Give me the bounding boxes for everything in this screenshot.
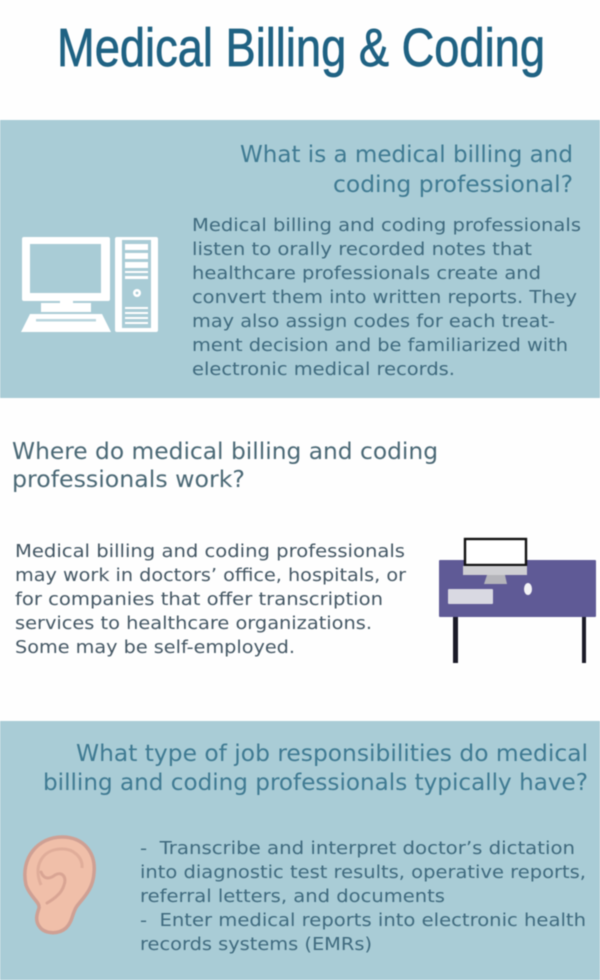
heading: where do professionals work [12,437,438,493]
text block: professional description: ment decision and be familiarized with [192,335,568,356]
icon: ear [25,837,94,933]
text block: workplaces [15,541,407,658]
heading: job responsibilities: billing and coding professionals typically have? [43,768,588,796]
panel: job responsibilities [0,721,600,980]
text block: workplaces: services to healthcare organizations. [15,613,372,634]
heading: job responsibilities [43,739,588,796]
text block: responsibilities list: referral letters, and documents [140,886,445,907]
text block: workplaces: Some may be self-employed. [15,637,295,658]
heading: what is a professional: What is a medical billing and [240,140,573,168]
text block: responsibilities list: - Transcribe and interpret doctor’s dictation [140,838,575,859]
text block: professional description: healthcare professionals create and [192,263,541,284]
icon: office desk with computer [439,539,596,663]
icon: desktop computer [21,237,158,332]
text block: professional description: may also assign codes for each treat- [192,311,555,332]
text block: responsibilities list: into diagnostic test results, operative reports, [140,862,586,883]
text block: workplaces: for companies that offer transcription [15,589,383,610]
heading: job responsibilities: What type of job responsibilities do medical [76,739,588,767]
text block: professional description: electronic medical records. [192,359,455,380]
text block: professional description: listen to orally recorded notes that [192,239,532,260]
panel: where do professionals work [12,437,596,663]
heading: what is a professional [240,140,573,198]
text block: professional description [192,215,581,380]
heading: what is a professional: coding professional? [333,170,573,198]
text block: professional description: Medical billing and coding professionals [192,215,581,236]
text block: responsibilities list: records systems (EMRs) [140,934,372,955]
text block: professional description: convert them into written reports. They [192,287,577,308]
heading: where do professionals work: professionals work? [12,465,245,493]
text block: responsibilities list [140,838,586,955]
text block: responsibilities list: - Enter medical reports into electronic health [140,910,586,931]
text block: workplaces: may work in doctors’ office, hospitals, or [15,565,407,586]
panel: what is a medical billing and coding professional [0,120,600,398]
text block: workplaces: Medical billing and coding professionals [15,541,405,562]
heading: where do professionals work: Where do medical billing and coding [12,437,438,465]
